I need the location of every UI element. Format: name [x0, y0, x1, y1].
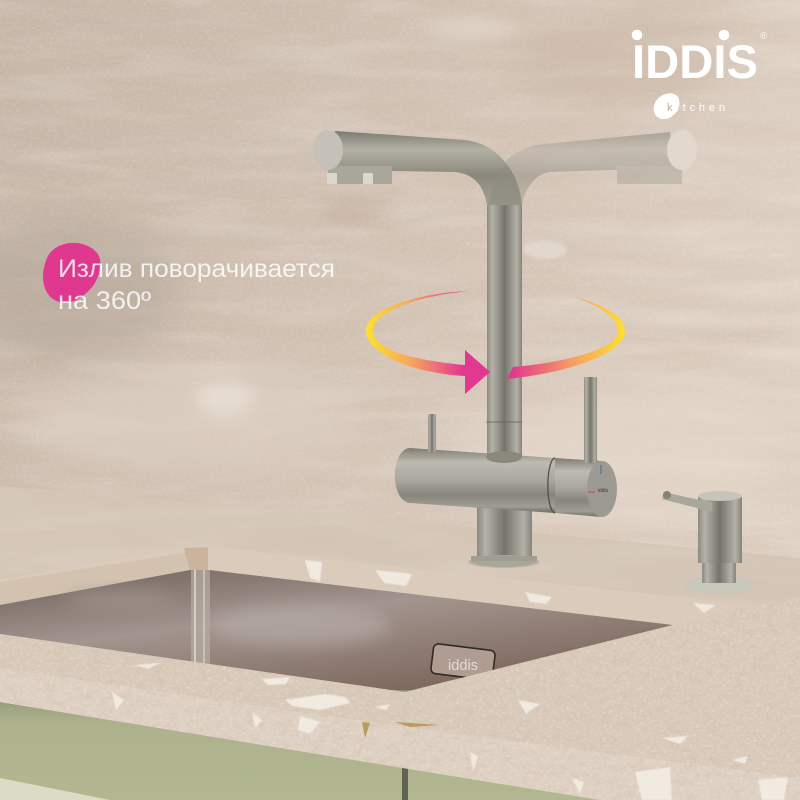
sink logo plate — [430, 643, 496, 681]
pink blob — [43, 243, 100, 303]
ghost spout end cap — [667, 130, 697, 170]
ghost spout position: right — [488, 132, 682, 205]
faucet body cylinder: iddis — [598, 488, 609, 494]
sink logo plate: iddis — [448, 657, 478, 674]
logo: ® — [760, 31, 768, 42]
counter: ochre vein — [362, 722, 440, 738]
faucet body cylinder — [395, 448, 617, 517]
faucet base stem — [468, 485, 540, 568]
kitchen mark: k itchen — [667, 102, 725, 114]
counter: front surface — [0, 595, 800, 800]
counter: white stone flakes — [112, 663, 788, 800]
counter: chipped edge behind sink — [0, 545, 752, 625]
counter top: back surface — [0, 486, 800, 605]
faucet — [395, 205, 617, 568]
spout column — [486, 205, 522, 463]
water stream — [191, 570, 210, 665]
kitchen mark — [654, 93, 725, 119]
background: travertine wall — [0, 0, 800, 600]
caption: Излив поворачивается — [58, 255, 335, 283]
cabinet fronts — [0, 690, 800, 800]
rotation arrow: right — [507, 296, 625, 379]
sink basin — [0, 570, 673, 692]
caption: на 360º — [58, 287, 151, 315]
spout: left — [313, 130, 522, 205]
left lever — [428, 414, 436, 452]
right lever — [584, 377, 597, 463]
logo: IDDIS — [632, 35, 758, 88]
soap dispenser — [663, 491, 754, 594]
caption — [58, 255, 335, 315]
rotation arrow: left — [366, 291, 490, 394]
